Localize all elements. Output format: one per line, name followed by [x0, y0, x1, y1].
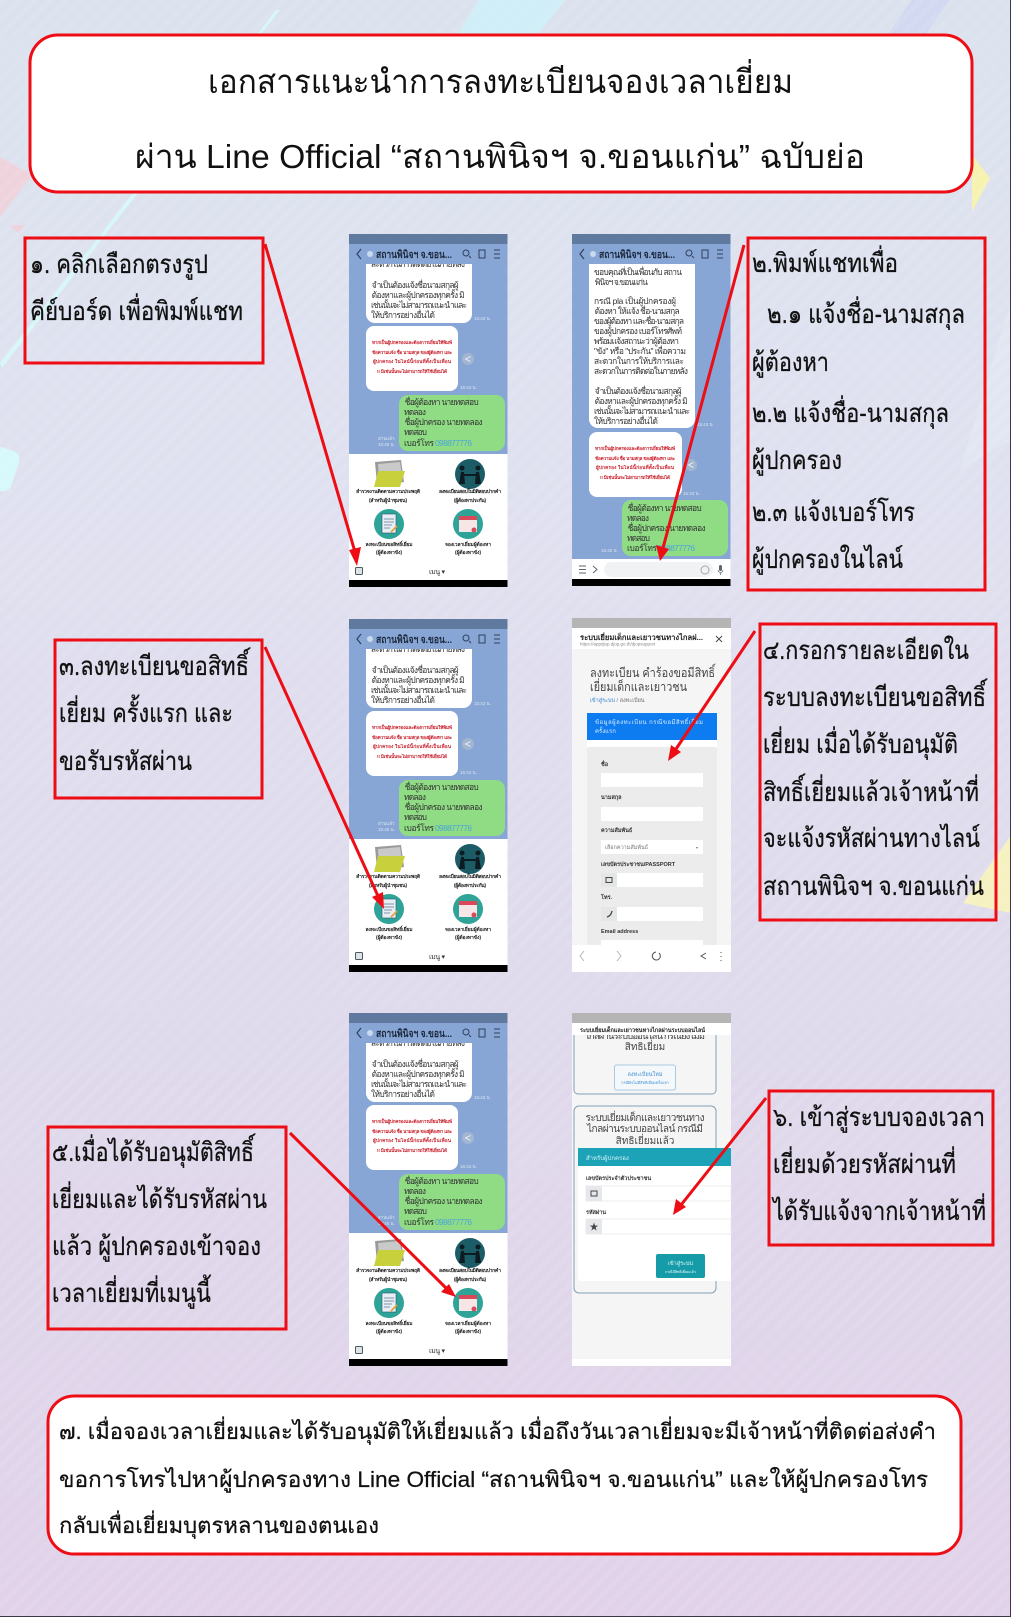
phone 3: LINE chat with menu: (ผู้ต้องหาขัง) [455, 934, 481, 942]
phone 2: LINE chat with keyboard input: ให้บริการอย่างอื่นได้ [594, 415, 658, 426]
phone 4: registration form: เลือกความสัมพันธ์ [605, 844, 648, 851]
phone 3: LINE chat with menu: หากเป็นผู้ปกครองและต้องการเยี่ยมให้พิมพ์ [372, 723, 452, 731]
phone 5: LINE chat with menu: ผู้ปกครอง ในไลน์นี้ก่อนที่ตั้งเป็นเพื่อน [373, 1136, 452, 1144]
phone 2: LINE chat with keyboard input: จำเป็นต้องแจ้งชื่อนามสกุลผู้ [595, 385, 682, 397]
phone 6: booking login: ระบบเยี่ยมเด็กและเยาวชนทางไกลผ่านระบบออนไลน์ [580, 1025, 705, 1034]
phone 2: LINE chat with keyboard input: สะดวกในการให้บริการและ [594, 356, 684, 366]
phone 5: LINE chat with menu: ข้อความแจ้ง ชื่อ นามสกุล ของผู้ต้องหา และ [372, 1128, 453, 1135]
phone 2: LINE chat with keyboard input: ทดลอง [627, 513, 649, 523]
phone 3: LINE chat with menu: (ผู้ต้องหาขัง) [376, 934, 402, 942]
phone 3: LINE chat with menu: (สำหรับผู้นำชุมชน) [369, 882, 407, 890]
arrow: step 2 [656, 245, 744, 561]
phone 6: booking login: เข้าสู่ระบบ [668, 1260, 693, 1267]
phone 2: LINE chat with keyboard input: เบอร์โทร [627, 543, 658, 553]
phone 1: LINE chat with menu: จองเวลาเยี่ยมผู้ต้องหา [445, 540, 491, 549]
callout 1: ๑. คลิกเลือกตรงรูป [30, 249, 208, 280]
phone 6: booking login: กรณียังไม่มีสิทธิเยี่ยมครั้งแรก [621, 1079, 669, 1085]
phone 1: LINE chat with menu: ทดสอบ [404, 427, 427, 437]
phone 2: LINE chat with keyboard input: หากเป็นผู้ปกครองและต้องการเยี่ยมให้พิมพ์ [595, 444, 675, 452]
phone 5: LINE chat with menu: ต้องหาและผู้ปกครองทุกครั้ง มิ [372, 1068, 465, 1080]
phone 5: LINE chat with menu: ให้บริการอย่างอื่นได้ [371, 1088, 435, 1099]
callout 3 [55, 640, 262, 798]
phone 2: LINE chat with keyboard input: ขอบคุณที่เป็นเพื่อนกับ สถาน [594, 266, 682, 278]
phone 5: LINE chat with menu: 15:43 น. [474, 1095, 491, 1100]
phone 1: LINE chat with menu: ชื่อผู้ต้องหา นายทดสอบ [405, 396, 479, 408]
callout 3: ๓.ลงทะเบียนขอสิทธิ์ [59, 647, 251, 681]
callout 3: ขอรับรหัสผ่าน [59, 746, 192, 776]
phone 5: LINE chat with menu: จำเป็นต้องแจ้งชื่อนามสกุลผู้ [372, 1058, 459, 1070]
phone 1: LINE chat with menu: สำรวจงานติดตามความประพฤติ [356, 488, 420, 495]
phone 5: LINE chat with menu: 15:45 น. [378, 1221, 395, 1226]
phone 2: LINE chat with keyboard input: ผู้ปกครอง ในไลน์นี้ก่อนที่ตั้งเป็นเพื่อน [596, 463, 675, 471]
phone 4: registration form: เยี่ยมเด็กและเยาวชน [590, 678, 687, 694]
phone 3: LINE chat with menu: 098877776 [435, 823, 472, 833]
phone 1: LINE chat with menu: ลงทะเบียนสอบในมิติสอบปากคำ [439, 488, 501, 495]
phone 5: LINE chat with menu: สะดวกในการติดต่อในภายหลัง [371, 1038, 465, 1048]
phone 6: booking login: ★ [589, 1222, 599, 1232]
phone 2: LINE chat with keyboard input: ของผู้ปกครอง เบอร์โทรศัพท์ [594, 326, 682, 337]
phone 2: LINE chat with keyboard input: !! มิเช่นนั้นจะไม่สามารถให้ใช้เยี่ยมได้ [600, 473, 670, 480]
callout 1 [25, 238, 263, 363]
callout 2: ๒.๒ แจ้งชื่อ-นามสกุล [752, 395, 949, 429]
phone 1: LINE chat with menu [349, 234, 508, 587]
phone 5: LINE chat with menu: เบอร์โทร [404, 1217, 434, 1227]
callout 7: bottom note: กลับเพื่อเยี่ยมบุตรหลานของตนเอง [59, 1510, 379, 1539]
phone 1: LINE chat with menu: ชื่อผู้ปกครอง นายทดลอง [405, 416, 483, 428]
phone 3: LINE chat with menu: สถานพินิจฯ จ.ขอน... [376, 634, 452, 646]
callout 6: เยี่ยมด้วยรหัสผ่านที่ [773, 1146, 956, 1179]
phone 3: LINE chat with menu: สะดวกในการติดต่อในภายหลัง [371, 644, 465, 654]
phone 3: LINE chat with menu: เช่นนั้นจะไม่สามารถแนะนำและ [371, 684, 467, 695]
phone 2: LINE chat with keyboard input: ของผู้ต้องหา และชื่อ-นามสกุล [594, 315, 684, 327]
phone 3: LINE chat with menu: ชื่อผู้ปกครอง นายทดลอง [405, 801, 483, 813]
phone 4: registration form: ชื่อ [601, 760, 608, 768]
phone 4: registration form: เข้าสู่ระบบ / ลงทะเบียน [590, 697, 645, 704]
callout 7: bottom note: ๗. เมื่อจองเวลาเยี่ยมและได้รับอนุมัติให้เยี่ยมแล้ว เมื่อถึงวันเวลาเยี่ยมจะมีเจ้าหน้าที่ติดต่อส่งคำ [59, 1416, 936, 1445]
phone 1: LINE chat with menu: จำเป็นต้องแจ้งชื่อนามสกุลผู้ [372, 279, 459, 291]
callout 2: ผู้ปกครอง [752, 445, 842, 476]
phone 2: LINE chat with keyboard input [572, 234, 730, 586]
phone 1: LINE chat with menu: สะดวกในการติดต่อในภายหลัง [371, 259, 465, 269]
phone 1: LINE chat with menu: ผู้ปกครอง ในไลน์นี้ก่อนที่ตั้งเป็นเพื่อน [373, 357, 452, 365]
phone 2: LINE chat with keyboard input: 098877776 [658, 543, 695, 553]
phone 5: LINE chat with menu: 15:43 น. [460, 1164, 477, 1169]
phone 3: LINE chat with menu: 15:45 น. [378, 827, 395, 832]
phone 1: LINE chat with menu: ทดลอง [404, 407, 426, 417]
callout 2: ๒.พิมพ์แชทเพื่อ [752, 245, 898, 278]
phone 1: LINE chat with menu: !! มิเช่นนั้นจะไม่สามารถให้ใช้เยี่ยมได้ [377, 367, 447, 374]
phone 1: LINE chat with menu: ข้อความแจ้ง ชื่อ นามสกุล ของผู้ต้องหา และ [372, 349, 453, 356]
phone 5: LINE chat with menu: !! มิเช่นนั้นจะไม่สามารถให้ใช้เยี่ยมได้ [377, 1146, 447, 1153]
phone 3: LINE chat with menu: เบอร์โทร [404, 823, 434, 833]
phone 5: LINE chat with menu [349, 1013, 508, 1366]
phone 3: LINE chat with menu: ข้อความแจ้ง ชื่อ นามสกุล ของผู้ต้องหา และ [372, 734, 453, 741]
phone 5: LINE chat with menu: ลงทะเบียนสอบในมิติสอบปากคำ [439, 1267, 501, 1274]
callout 2: ๒.๓ แจ้งเบอร์โทร [752, 497, 915, 527]
phone 1: LINE chat with menu: 098877776 [435, 438, 472, 448]
phone 6: booking login: รหัสผ่าน [586, 1209, 606, 1216]
phone 5: LINE chat with menu: ชื่อผู้ปกครอง นายทดลอง [405, 1195, 483, 1207]
phone 4: registration form: โทร. [600, 893, 613, 901]
phone 6: booking login: ไกลผ่านระบบออนไลน์ กรณียังไม่มี [584, 1030, 705, 1042]
callout 5: แล้ว ผู้ปกครองเข้าจอง [52, 1231, 261, 1262]
phone 1: LINE chat with menu: (ผู้ต้องหาขัง) [376, 549, 402, 557]
phone 3: LINE chat with menu: ลงทะเบียนสอบในมิติสอบปากคำ [439, 873, 501, 880]
callout 2: ผู้ปกครองในไลน์ [752, 544, 903, 575]
phone 4: registration form: https://appdjop.djop.go.th/djopsupport [580, 642, 656, 646]
callout 4: เยี่ยม เมื่อได้รับอนุมัติ [763, 726, 958, 760]
phone 3: LINE chat with menu: ลงทะเบียนขอสิทธิ์เยี่ยม [366, 925, 412, 933]
phone 5: LINE chat with menu: สถานพินิจฯ จ.ขอน... [376, 1028, 452, 1040]
phone 1: LINE chat with menu: เบอร์โทร [404, 438, 434, 448]
phone 5: LINE chat with menu: (ผู้ต้องหาขัง) [376, 1328, 402, 1336]
callout 2: ผู้ต้องหา [752, 347, 829, 378]
callout 1: คีย์บอร์ด เพื่อพิมพ์แชท [30, 293, 243, 326]
phone 3: LINE chat with menu: 15:43 น. [474, 701, 491, 706]
phone 4: registration form: Email address [601, 929, 638, 935]
phone 3: LINE chat with menu: จำเป็นต้องแจ้งชื่อนามสกุลผู้ [372, 664, 459, 676]
phone 3: LINE chat with menu: อ่านแล้ว [378, 821, 395, 826]
phone 1: LINE chat with menu: เมนู ▾ [429, 569, 445, 576]
phone 4: registration form: ระบบเยี่ยมเด็กและเยาวชนทางไกลผ่... [580, 631, 703, 642]
phone 2: LINE chat with keyboard input: สะดวกในการติดต่อในภายหลัง [594, 366, 688, 376]
phone 4: registration form: นามสกุล [601, 794, 622, 801]
phone 2: LINE chat with keyboard input: "ขัง" หรือ "ประกัน" เพื่อความ [594, 345, 686, 356]
callout 7: bottom note [48, 1396, 961, 1554]
phone 4: registration form: ครั้งแรก [595, 725, 616, 735]
phone 5: LINE chat with menu: หากเป็นผู้ปกครองและต้องการเยี่ยมให้พิมพ์ [372, 1117, 452, 1125]
phone 1: LINE chat with menu: หากเป็นผู้ปกครองและต้องการเยี่ยมให้พิมพ์ [372, 338, 452, 346]
phone 3: LINE chat with menu: ให้บริการอย่างอื่นได้ [371, 694, 435, 705]
phone 2: LINE chat with keyboard input: ชื่อผู้ต้องหา นายทดสอบ [628, 502, 702, 514]
phone 2: LINE chat with keyboard input: ทดสอบ [627, 533, 650, 543]
callout 5: เยี่ยมและได้รับรหัสผ่าน [52, 1181, 267, 1214]
phone 3: LINE chat with menu: สำรวจงานติดตามความประพฤติ [356, 873, 420, 880]
phone 1: LINE chat with menu: 15:45 น. [378, 442, 395, 447]
phone 2: LINE chat with keyboard input: พินิจฯ จ.ขอนแก่น [595, 277, 648, 287]
phone 5: LINE chat with menu: (สำหรับผู้นำชุมชน) [369, 1276, 407, 1284]
phone 6: booking login: เลขบัตรประจำตัวประชาชน [586, 1174, 651, 1182]
phone 6: booking login: สิทธิเยี่ยมแล้ว [616, 1133, 674, 1147]
phone 1: LINE chat with menu: สถานพินิจฯ จ.ขอน... [376, 249, 452, 261]
title box [30, 35, 972, 192]
phone 2: LINE chat with keyboard input: ต้องหาและผู้ปกครองทุกครั้ง มิ [595, 395, 688, 407]
phone 3: LINE chat with menu: ทดลอง [404, 792, 426, 802]
phone 2: LINE chat with keyboard input: เช่นนั้นจะไม่สามารถแนะนำและ [594, 405, 690, 416]
title box: เอกสารแนะนำการลงทะเบียนจองเวลาเยี่ยม [208, 59, 793, 100]
phone 6: booking login: ไกลผ่านระบบออนไลน์ กรณีมี [586, 1123, 703, 1135]
callout 5 [48, 1127, 286, 1329]
phone 5: LINE chat with menu: ทดสอบ [404, 1206, 427, 1216]
phone 2: LINE chat with keyboard input: 15:45 น. [601, 548, 618, 553]
phone 4: registration form: ข้อมูลผู้ลงทะเบียน กรณีขอมีสิทธิ์เยี่ยม [595, 717, 703, 726]
phone 6: booking login: ลงทะเบียนใหม่ [628, 1071, 663, 1078]
phone 5: LINE chat with menu: ลงทะเบียนขอสิทธิ์เยี่ยม [366, 1319, 412, 1327]
phone 3: LINE chat with menu: ต้องหาและผู้ปกครองทุกครั้ง มิ [372, 674, 465, 686]
callout 6 [769, 1091, 993, 1245]
phone 6: booking login: ระบบเยี่ยมเด็กและเยาวชนทาง [586, 1110, 705, 1124]
callout 2: ๒.๑ แจ้งชื่อ-นามสกุล [767, 296, 965, 330]
phone 6: booking login [572, 1013, 731, 1366]
phone 1: LINE chat with menu: ให้บริการอย่างอื่นได้ [371, 309, 435, 320]
phone 3: LINE chat with menu: !! มิเช่นนั้นจะไม่สามารถให้ใช้เยี่ยมได้ [377, 752, 447, 759]
title box: ผ่าน Line Official “สถานพินิจฯ จ.ขอนแก่น” ฉบับย่อ [135, 138, 865, 175]
phone 5: LINE chat with menu: ทดลอง [404, 1186, 426, 1196]
phone 3: LINE chat with menu [349, 619, 508, 972]
phone 2: LINE chat with keyboard input: พร้อมแจ้งสถานะว่าผู้ต้องหา [594, 336, 679, 347]
phone 5: LINE chat with menu: (ผู้ต้องหาขัง) [455, 1328, 481, 1336]
callout 3: เยี่ยม ครั้งแรก และ [59, 694, 233, 728]
phone 4: registration form: ▾ [696, 845, 698, 850]
phone 5: LINE chat with menu: เมนู ▾ [429, 1348, 445, 1355]
phone 3: LINE chat with menu: ทดสอบ [404, 812, 427, 822]
phone 1: LINE chat with menu: 15:43 น. [474, 316, 491, 321]
phone 3: LINE chat with menu: จองเวลาเยี่ยมผู้ต้องหา [445, 925, 491, 934]
phone 6: booking login: กรณีมีสิทธิเยี่ยมแล้ว [665, 1269, 696, 1274]
phone 6: booking login: สิทธิเยี่ยม [625, 1039, 665, 1053]
phone 2: LINE chat with keyboard input: ข้อความแจ้ง ชื่อ นามสกุล ของผู้ต้องหา และ [595, 455, 676, 462]
phone 4: registration form: ลงทะเบียน คำร้องขอมีสิทธิ์ [590, 663, 716, 680]
phone 4: registration form: เลขบัตรประชาชน/PASSPORT [601, 860, 676, 868]
phone 3: LINE chat with menu: ผู้ปกครอง ในไลน์นี้ก่อนที่ตั้งเป็นเพื่อน [373, 742, 452, 750]
phone 3: LINE chat with menu: ชื่อผู้ต้องหา นายทดสอบ [405, 781, 479, 793]
phone 5: LINE chat with menu: สำรวจงานติดตามความประพฤติ [356, 1267, 420, 1274]
phone 2: LINE chat with keyboard input: กรณี pla เป็นผู้ปกครองผู้ [594, 296, 676, 307]
arrow: step 4 [668, 631, 755, 761]
callout 7: bottom note: ขอการโทรไปหาผู้ปกครองทาง Line Official “สถานพินิจฯ จ.ขอนแก่น” และให้ผู้ปกครองโทร [59, 1467, 928, 1493]
phone 2: LINE chat with keyboard input: สถานพินิจฯ จ.ขอน... [599, 249, 675, 261]
callout 4 [760, 624, 996, 920]
phone 5: LINE chat with menu: (ผู้ต้องหาประกัน) [454, 1276, 486, 1284]
phone 1: LINE chat with menu: 15:43 น. [460, 385, 477, 390]
phone 1: LINE chat with menu: เช่นนั้นจะไม่สามารถแนะนำและ [371, 299, 467, 310]
arrow: step 1 [265, 244, 361, 566]
phone 5: LINE chat with menu: 098877776 [435, 1217, 472, 1227]
phone 1: LINE chat with menu: ต้องหาและผู้ปกครองทุกครั้ง มิ [372, 289, 465, 301]
arrow: step 5 [290, 1133, 456, 1297]
phone 2: LINE chat with keyboard input: ชื่อผู้ปกครอง นายทดลอง [628, 522, 706, 534]
arrow: step 3 [265, 647, 384, 909]
phone 3: LINE chat with menu: 15:43 น. [460, 770, 477, 775]
phone 2: LINE chat with keyboard input: 15:43 น. [697, 422, 714, 427]
phone 5: LINE chat with menu: ชื่อผู้ต้องหา นายทดสอบ [405, 1175, 479, 1187]
phone 1: LINE chat with menu: (ผู้ต้องหาประกัน) [454, 497, 486, 505]
callout 5: เวลาเยี่ยมที่เมนูนี้ [52, 1274, 211, 1309]
callout 2 [748, 238, 985, 590]
phone 1: LINE chat with menu: ลงทะเบียนขอสิทธิ์เยี่ยม [366, 540, 412, 548]
arrow: step 6 [673, 1098, 766, 1215]
callout 4: ๔.กรอกรายละเอียดใน [763, 635, 969, 665]
phone 5: LINE chat with menu: อ่านแล้ว [378, 1215, 395, 1220]
phone 1: LINE chat with menu: อ่านแล้ว [378, 436, 395, 441]
phone 1: LINE chat with menu: (ผู้ต้องหาขัง) [455, 549, 481, 557]
phone 4: registration form [572, 618, 731, 972]
callout 5: ๕.เมื่อได้รับอนุมัติสิทธิ์ [52, 1133, 256, 1168]
phone 5: LINE chat with menu: เช่นนั้นจะไม่สามารถแนะนำและ [371, 1078, 467, 1089]
phone 4: registration form: ความสัมพันธ์ [601, 827, 633, 834]
phone 5: LINE chat with menu: จองเวลาเยี่ยมผู้ต้องหา [445, 1319, 491, 1328]
phone 2: LINE chat with keyboard input: 15:43 น. [683, 491, 700, 496]
phone 3: LINE chat with menu: เมนู ▾ [429, 954, 445, 961]
phone 2: LINE chat with keyboard input: ต้องหา ให้แจ้ง ชื่อ-นามสกุล [595, 305, 680, 317]
phone 1: LINE chat with menu: (สำหรับผู้นำชุมชน) [369, 497, 407, 505]
phone 6: booking login: สำหรับผู้ปกครอง [586, 1155, 629, 1162]
phone 3: LINE chat with menu: (ผู้ต้องหาประกัน) [454, 882, 486, 890]
